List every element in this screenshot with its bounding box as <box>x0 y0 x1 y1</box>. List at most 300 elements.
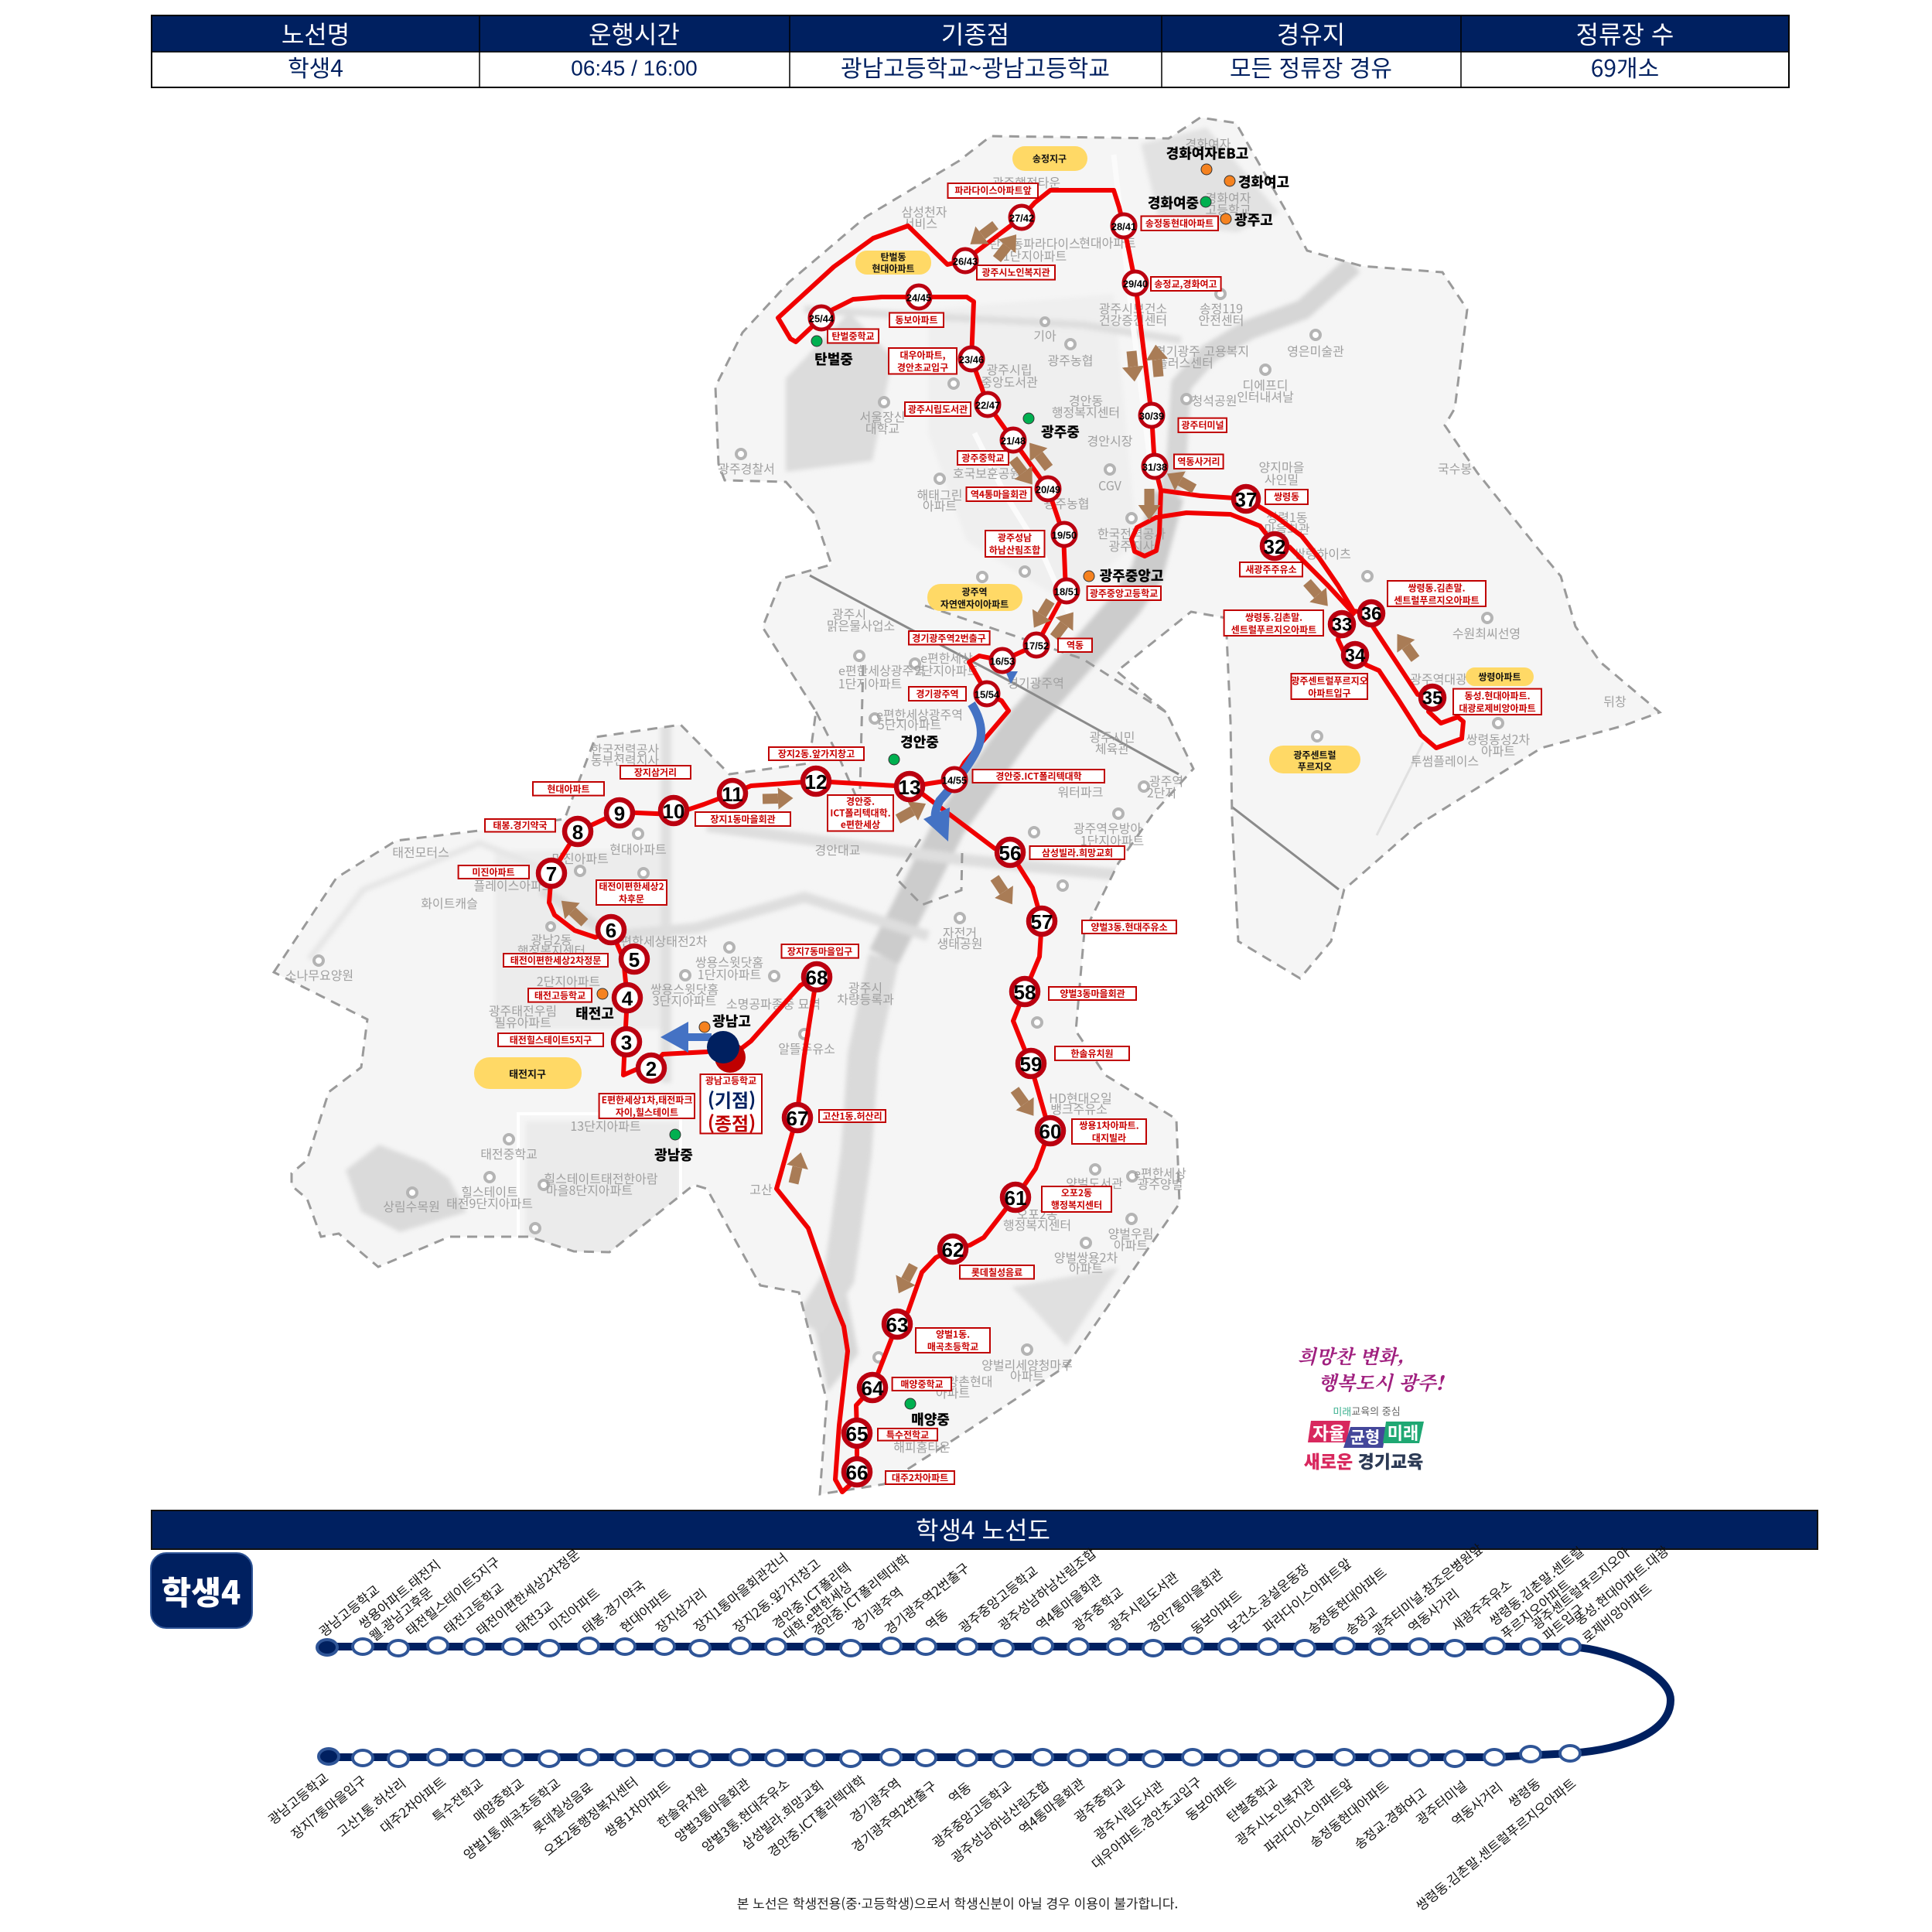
map place names: 아파트 <box>936 1383 970 1401</box>
return stop names: 경기광주역 <box>845 1773 904 1826</box>
map place names: 탄벌동파라다이스 <box>989 234 1080 252</box>
return stop names: 광주시립도서관 <box>1089 1775 1167 1844</box>
return stop names: 대주2차아파트 <box>375 1771 449 1837</box>
shared outbound and return stop circles: 26/43 <box>953 255 978 268</box>
stop label: 장지1동마을회관 <box>710 812 776 826</box>
dashed district boundaries <box>274 118 1660 1494</box>
map place names: 힐스테이트태전한아람 <box>544 1169 658 1187</box>
school markers: 광주고 <box>1234 210 1273 230</box>
return stop names: 쌍령동 <box>1504 1773 1544 1811</box>
return stop names <box>263 1767 1579 1914</box>
map place names: 쌍용스윗닷홈 <box>695 952 763 971</box>
numbered stop circles: 2 <box>646 1057 657 1080</box>
return stop names: 경안중.ICT폴리텍대학 <box>763 1770 869 1861</box>
stop label: 태전고등학교 <box>534 988 585 1002</box>
district name pills: 현대아파트 <box>872 261 915 275</box>
stop label <box>599 1094 695 1118</box>
return stop names: 광주시노인복지관 <box>1231 1773 1318 1849</box>
logo badge: future: 미래 <box>1388 1420 1418 1445</box>
shared outbound and return stop circles: 30/39 <box>1139 410 1164 422</box>
outbound stop names: 태전3교 <box>510 1596 557 1638</box>
map place names: 상림수목원 <box>383 1196 440 1215</box>
numbered stop circles: 3 <box>621 1031 632 1054</box>
shared outbound and return stop circles: 14/55 <box>942 775 967 786</box>
direction arrows <box>572 225 1415 1280</box>
stop label: 양벌1동. <box>936 1327 970 1341</box>
start and end terminal marker: (종점) <box>708 1109 756 1135</box>
shared outbound and return stop circles: 17/52 <box>1024 640 1049 651</box>
logo badge: balance: 균형 <box>1350 1425 1380 1449</box>
shared outbound and return stop circles: 18/51 <box>1054 586 1079 597</box>
school markers: 광남중 <box>654 1145 693 1165</box>
map place names: 광주농협 <box>1048 350 1093 369</box>
outbound stop names: 역4통마을회관 <box>1031 1568 1105 1634</box>
stop label <box>1058 639 1092 652</box>
table cell: stop count: 69개소 <box>1591 49 1659 84</box>
return stop names: 장지7통마을입구 <box>286 1770 370 1843</box>
map place names: 기아 <box>1033 326 1056 344</box>
shared outbound and return stop circles: 25/44 <box>809 312 835 325</box>
map place names: 양벌도서관 <box>1066 1173 1123 1192</box>
map place names: 아파트 <box>923 496 957 514</box>
stop label <box>533 782 604 796</box>
shared outbound and return stop circles: 23/46 <box>959 354 984 365</box>
school markers: 광주중 <box>1041 422 1080 442</box>
outbound stop names: 광남고등학교 <box>314 1579 383 1640</box>
map place names: 삼성천자 <box>902 202 947 220</box>
map place names: 광남2동 <box>531 930 572 948</box>
bus route line <box>549 190 1463 1492</box>
stop label: 한솔유치원 <box>1070 1047 1114 1060</box>
logo wordmark: 새로운 경기교육 <box>1304 1447 1423 1473</box>
map place names: 호국보훈공원 <box>953 463 1021 482</box>
return stop names: 양벌1통.매곡초등학교 <box>459 1773 564 1863</box>
stop label: 광주터미널 <box>1181 418 1224 432</box>
outbound stop names: 파트입구 <box>1538 1599 1588 1644</box>
footer notice: 본 노선은 학생전용(중·고등학생)으로서 학생신분이 아닐 경우 이용이 불가합니다. <box>737 1893 1178 1912</box>
stop label: 대지빌라 <box>1092 1131 1126 1145</box>
outbound stop names: 경기광주역2번출구 <box>879 1558 973 1638</box>
route name badge <box>151 1553 252 1628</box>
return stop names: 대우아파트.경안초교입구 <box>1087 1771 1205 1872</box>
map place names: 1단지아파트 <box>1080 831 1144 849</box>
stop label: 광주성남 <box>998 531 1032 544</box>
map place names: 쌍령1동 <box>1266 507 1308 526</box>
map terrain patches, river and roads <box>309 128 1423 1392</box>
stop label: 파라다이스아파트앞 <box>954 184 1032 196</box>
stop label: 장지삼거리 <box>634 766 677 779</box>
outbound stop names: 현대아파트 <box>615 1583 674 1637</box>
map place names: 알뜰주유소 <box>778 1039 835 1057</box>
map place names: 2단지 <box>1147 783 1176 801</box>
map place names: e편한세상 <box>920 648 973 667</box>
school markers: 경화여자EB고 <box>1166 143 1248 163</box>
stop label: 센트럴푸르지오아파트 <box>1394 594 1480 606</box>
route name badge: 학생4 <box>162 1567 241 1615</box>
numbered stop circles: 9 <box>614 802 625 825</box>
stop label: 양벌3동.현대주유소 <box>1091 920 1168 934</box>
map place names: 인터내셔날 <box>1237 387 1294 405</box>
outbound stop names: 태봉.경기약국 <box>577 1575 649 1638</box>
numbered stop circles: 8 <box>572 821 583 844</box>
map place names: 생태공원 <box>937 934 982 952</box>
map place names: 투썸플레이스 <box>1411 751 1479 770</box>
map place names: 영은미술관 <box>1287 341 1344 360</box>
outbound stop names: 로제비앙아파트 <box>1577 1579 1655 1647</box>
school markers: 광남고 <box>712 1011 751 1031</box>
stop label: 경안초교입구 <box>897 360 948 374</box>
route strip diagram <box>263 1538 1672 1914</box>
map place names: 경기광주 고용복지 <box>1155 341 1249 360</box>
return stop names: 송정동현대아파트 <box>1305 1775 1392 1852</box>
stop label: 태전이편한세상2 <box>599 880 664 893</box>
map place names: e편한세상광주역 <box>876 705 963 723</box>
logo badge: balance <box>1343 1425 1387 1449</box>
numbered stop circles: 6 <box>606 919 616 942</box>
district name pills: 태전지구 <box>509 1066 546 1081</box>
map place names: 광주시 <box>848 978 882 996</box>
stop label: 오포2동 <box>1061 1186 1092 1199</box>
map place names: 3단지아파트 <box>653 991 716 1009</box>
outbound stop names: 대학.e편한세상 <box>778 1575 855 1644</box>
numbered stop circles: 60 <box>1039 1120 1061 1143</box>
outbound stop names: 태전이편한세상2차정문 <box>471 1544 583 1640</box>
map place names: 소나무요양원 <box>285 965 353 984</box>
outbound stop names: 태전고등학교 <box>439 1577 507 1638</box>
shared outbound and return stop circles: 29/40 <box>1123 278 1148 289</box>
start and end terminal marker: (기점) <box>708 1086 756 1112</box>
school markers: 경안중 <box>900 732 939 752</box>
stop label: 자이,힐스테이트 <box>616 1106 678 1118</box>
stop label <box>620 766 691 779</box>
map place names: 청석공원 <box>1192 391 1237 409</box>
numbered stop circles: 4 <box>622 987 633 1010</box>
stop label <box>889 348 957 374</box>
map place names: 한국전력공사 <box>591 739 659 758</box>
table cell: via: 모든 정류장 경유 <box>1230 49 1392 84</box>
stop label <box>1291 674 1368 699</box>
numbered stop circles: 12 <box>805 770 827 794</box>
map place names: 차량등록과 <box>837 989 894 1008</box>
stop label <box>695 812 790 826</box>
table header: terminals: 기종점 <box>941 15 1009 51</box>
return stop names: 광주성남하남산림조합 <box>947 1775 1053 1866</box>
stop label <box>985 531 1044 557</box>
table header: stop count: 정류장 수 <box>1576 15 1674 51</box>
map place names: 서비스 <box>903 213 937 232</box>
route diagram header bar: 학생4 노선도 <box>916 1511 1050 1547</box>
stop label: 송정동현대아파트 <box>1145 217 1213 230</box>
outbound stop names: 장지삼거리 <box>650 1583 710 1637</box>
outbound stop names: 파라다이스아파트앞 <box>1258 1553 1355 1637</box>
map place names: 디에프디 <box>1243 375 1288 394</box>
map place names: 화이트캐슬 <box>421 893 478 912</box>
outbound stop names: 보건소.공설운동장 <box>1222 1558 1312 1637</box>
map place names: 동부전력지사 <box>591 750 659 769</box>
stop label: 경기광주역2번출구 <box>912 631 986 645</box>
map place names: 광주시민 <box>1090 727 1135 746</box>
outbound stop names: 경안중.ICT폴리텍 <box>767 1557 855 1633</box>
school markers: 경화여중 <box>1148 193 1199 213</box>
numbered stop circles: 67 <box>787 1107 808 1130</box>
return stop names: 오포2동행정복지센터 <box>539 1771 641 1859</box>
map base area with dashed boundary <box>274 118 1660 1494</box>
map place names: 아파트 <box>1481 741 1515 759</box>
stop label: 태봉.경기약국 <box>493 818 548 832</box>
map place names: 경안대교 <box>815 840 860 858</box>
map place names: 경화여자 <box>1206 188 1251 207</box>
return stop names: 동보아파트 <box>1181 1771 1240 1824</box>
map place names: 국수봉 <box>1438 459 1472 477</box>
stop label <box>960 1265 1034 1279</box>
numbered stop circles: 37 <box>1235 488 1257 511</box>
map place names: 양벌리세양청마루 <box>981 1355 1073 1374</box>
stop label: 경기광주역 <box>916 687 959 701</box>
map place names: 아파트 <box>1069 1258 1103 1277</box>
shared outbound and return stop circles: 27/42 <box>1009 212 1034 224</box>
map place names: 태전중학교 <box>480 1144 538 1162</box>
numbered stop circles: 66 <box>846 1461 868 1484</box>
numbered stop circles <box>538 486 1444 1485</box>
table header: operating time: 운행시간 <box>589 15 680 51</box>
outbound stop names: 송정동현대아파트 <box>1302 1562 1390 1638</box>
return stop names: 광주중앙고등학교 <box>927 1775 1015 1852</box>
return stop names: 역4통마을회관 <box>1014 1773 1088 1838</box>
shared outbound and return stop circles: 21/48 <box>1001 435 1026 447</box>
table header: via: 경유지 <box>1277 15 1345 51</box>
district name pills: 광주역 <box>961 585 988 599</box>
stop label: 하남산림조합 <box>989 543 1040 557</box>
stop label: 행정복지센터 <box>1051 1199 1102 1211</box>
stop label: 특수전학교 <box>886 1428 929 1442</box>
map place names: CGV <box>1098 476 1122 494</box>
district name pills: 쌍령아파트 <box>1478 670 1521 684</box>
outbound stop names: 광주센트럴푸르지오아 <box>1527 1542 1633 1633</box>
map place names: 경안동 <box>1069 391 1103 409</box>
outbound stop names: 장지1통마을회관건너 <box>688 1548 791 1636</box>
outbound stop names: 웰.광남고후문 <box>364 1582 436 1645</box>
map place names: 13단지아파트 <box>570 1116 641 1135</box>
stop label <box>916 1327 990 1353</box>
stop label: 쌍령동 <box>1274 490 1299 503</box>
numbered stop circles: 57 <box>1031 910 1053 934</box>
stop label <box>1388 581 1486 606</box>
return stop names: 매양중학교 <box>469 1773 527 1826</box>
outbound stop names: 동성.현대아파트.대광 <box>1569 1541 1672 1629</box>
map place names: 광주행정타운 <box>992 172 1060 191</box>
map place names <box>285 134 1626 1456</box>
stop label: 장지2동.앞가지창고 <box>778 747 855 760</box>
map place names: 행정복지센터 <box>517 940 585 959</box>
shared outbound and return stop circles: 31/38 <box>1142 461 1167 473</box>
outbound stop names: 동보아파트 <box>1186 1585 1245 1638</box>
numbered stop circles: 35 <box>1422 688 1442 708</box>
outbound stop names: 장지2동.앞가지창고 <box>728 1554 824 1637</box>
map place names: 안전센터 <box>1199 310 1244 329</box>
numbered stop circles: 36 <box>1361 603 1381 625</box>
map place names: 2단지아파트 <box>537 971 600 990</box>
return stop names: 역동사거리 <box>1447 1777 1506 1830</box>
stop label: 양벌3동마을회관 <box>1060 987 1125 1000</box>
map place names: 고산 <box>749 1179 773 1198</box>
outbound stop names: 쌍령동.김촌말.센트럴 <box>1484 1541 1587 1630</box>
return stop names: 삼성빌라.희망교회 <box>736 1775 827 1854</box>
stop label: 역동사거리 <box>1177 455 1220 468</box>
map place names: 양벌우림 <box>1108 1224 1153 1242</box>
map place names: 아파트 <box>1010 1366 1044 1384</box>
map place names: 고등학교 <box>1206 200 1251 218</box>
shared outbound and return stop circles: 28/41 <box>1111 221 1136 232</box>
map place names: 자전거 <box>943 923 977 941</box>
map place names: 쌍령동성2차 <box>1466 729 1531 748</box>
outbound stop names: 경안7통마을회관 <box>1142 1564 1227 1637</box>
map place names: 1단지아파트 <box>698 964 761 983</box>
stop label <box>459 865 529 879</box>
stop label: 현대아파트 <box>547 783 590 795</box>
outbound stop names: 광주시립도서관 <box>1104 1567 1182 1635</box>
stop label: 새광주주유소 <box>1245 563 1297 575</box>
return stop names: 쌍용1차아파트 <box>599 1775 674 1841</box>
map place names: 양벌쌍용2차 <box>1054 1248 1118 1266</box>
map place names: 광주태전우림 <box>489 1001 557 1019</box>
school markers: 광주중앙고 <box>1100 565 1163 585</box>
outbound stop names: 미진아파트 <box>544 1582 603 1636</box>
map place names: 해태그린 <box>917 485 962 503</box>
stop label: 쌍용1차아파트. <box>1079 1118 1139 1132</box>
start and end terminal marker: 광남고등학교 <box>705 1074 756 1087</box>
return stop names: 광남고등학교 <box>263 1767 332 1828</box>
numbered stop circles: 59 <box>1020 1053 1042 1076</box>
stop label <box>1453 689 1541 715</box>
map place names: 해피홈타운 <box>893 1437 951 1456</box>
stop label: 광주센트럴푸르지오 <box>1291 674 1368 687</box>
outbound stop names: 경안중.ICT폴리텍대학 <box>807 1548 913 1640</box>
blue direction arrows <box>688 671 1018 1037</box>
numbered stop circles: 64 <box>862 1377 884 1400</box>
numbered stop circles: 34 <box>1345 645 1366 667</box>
stop label <box>596 880 667 905</box>
slogan lettering: 희망찬 변화, <box>1298 1342 1403 1370</box>
map place names: 뱅크주유소 <box>1050 1099 1108 1118</box>
return stop names: 경기광주역2번출구 <box>847 1775 940 1856</box>
map place names: 광주시 <box>832 604 866 623</box>
numbered stop circles: 58 <box>1014 981 1036 1004</box>
map place names: 소명공파종중 묘역 <box>726 994 821 1012</box>
outbound stop names: 푸르지오아파트 <box>1496 1575 1574 1643</box>
school markers <box>575 143 1289 1429</box>
map place names: 뒤창 <box>1603 691 1626 710</box>
outbound stop names: 광주성남하남산림조합 <box>993 1543 1100 1634</box>
outbound stop names: 광주중학교 <box>1067 1582 1127 1635</box>
map place names: 광주역대광 <box>1410 669 1467 688</box>
stop label: 대우아파트, <box>899 348 946 362</box>
stop label: 장지7동마을입구 <box>787 945 852 957</box>
map place names: 현대아파트 <box>609 839 667 858</box>
stop label: 경안중.ICT폴리텍대학 <box>995 770 1082 783</box>
stop label <box>1042 1186 1111 1212</box>
stop label <box>1265 490 1308 504</box>
map place names: 워터파크 <box>1058 782 1103 800</box>
map place names: 플레이스아파트 <box>473 876 554 894</box>
map place names: 쌍용스윗닷홈 <box>650 979 719 998</box>
numbered stop circles: 61 <box>1005 1186 1026 1210</box>
district name pills <box>474 146 1534 1089</box>
return stop names: 광주터미널 <box>1411 1775 1470 1828</box>
stop label: 광주시노인복지관 <box>981 266 1050 278</box>
map place names: 태전모터스 <box>392 842 449 861</box>
stop label: ICT폴리텍대학. <box>830 806 891 820</box>
map place names: 경화여자 <box>1186 134 1231 152</box>
stop label: 경안중. <box>846 795 875 807</box>
return stop names: 쌍령동.김촌말.센트럴푸르지오아파트 <box>1411 1773 1579 1914</box>
route diagram header bar <box>152 1510 1818 1549</box>
stop label: 대광로제비앙아파트 <box>1459 701 1536 715</box>
stop label: 광주중앙고등학교 <box>1090 586 1158 600</box>
route map <box>274 118 1660 1494</box>
shared outbound and return stop circles: 24/45 <box>906 292 931 303</box>
map place names: 광주역 <box>1149 771 1183 790</box>
stop label: 차후문 <box>619 893 644 905</box>
map place names: 경기광주역 <box>1007 673 1064 691</box>
numbered stop circles: 65 <box>846 1422 868 1446</box>
stop label: e편한세상 <box>841 818 880 831</box>
map place names: 이편한세상태전2차 <box>609 931 708 950</box>
stop label: 쌍령동.김촌말. <box>1408 582 1466 594</box>
stop label: 센트럴푸르지오아파트 <box>1231 623 1316 636</box>
stop label <box>973 770 1104 783</box>
school markers: 탄벌중 <box>814 349 853 369</box>
stop label: 미진아파트 <box>472 865 515 879</box>
return stop names: 광주중학교 <box>1070 1773 1128 1826</box>
table header: route name: 노선명 <box>282 15 350 51</box>
numbered stop circles: 7 <box>546 862 557 886</box>
return stop names: 양벌3통마을회관 <box>670 1773 753 1846</box>
return stop names: 역동 <box>944 1777 975 1807</box>
map place names: 광주시보건소 <box>1099 299 1167 317</box>
map place names: 행정복지센터 <box>1052 402 1120 421</box>
route info table <box>152 15 1789 87</box>
outbound stop names: 광주중앙고등학교 <box>954 1561 1041 1637</box>
numbered stop circles: 62 <box>942 1238 964 1261</box>
shared outbound and return stop circles: 19/50 <box>1052 529 1077 541</box>
return stop names: 송정교.경화여고 <box>1350 1782 1430 1853</box>
outbound stop names: 역동 <box>920 1604 951 1634</box>
outbound stop names: 경기광주역 <box>847 1582 906 1635</box>
map place names: 수원최씨선영 <box>1452 623 1521 642</box>
map place names: 양촌현대 <box>947 1371 992 1390</box>
return stop names: 롯데칠성음료 <box>527 1777 596 1838</box>
map place names: 한국전력공사 <box>1097 524 1166 542</box>
district name pills: 푸르지오 <box>1298 759 1332 773</box>
map place names: 맑은물사업소 <box>827 616 895 634</box>
stop name boxes <box>459 183 1541 1484</box>
school markers: 매양중 <box>911 1409 950 1429</box>
map place names: 경안시장 <box>1087 431 1133 449</box>
map place names: 서울장신 <box>860 407 905 425</box>
outbound stop names: 새광주주유소 <box>1446 1574 1515 1635</box>
stop label: 아파트입구 <box>1308 687 1351 699</box>
map place names: 1단지아파트 <box>1003 246 1067 265</box>
school markers: 태전고 <box>575 1003 614 1023</box>
start and end terminal marker <box>701 1031 762 1135</box>
map place names: 대학교 <box>865 418 899 437</box>
stop label <box>828 795 893 831</box>
map place names: 양지마을 <box>1259 457 1304 476</box>
return stop names: 파라다이스아파트앞 <box>1259 1773 1356 1856</box>
district name pills: 광주센트럴 <box>1293 749 1336 761</box>
stop label: 역4통마을회관 <box>971 487 1027 501</box>
map place names: 쌍령하이츠 <box>1294 544 1351 562</box>
